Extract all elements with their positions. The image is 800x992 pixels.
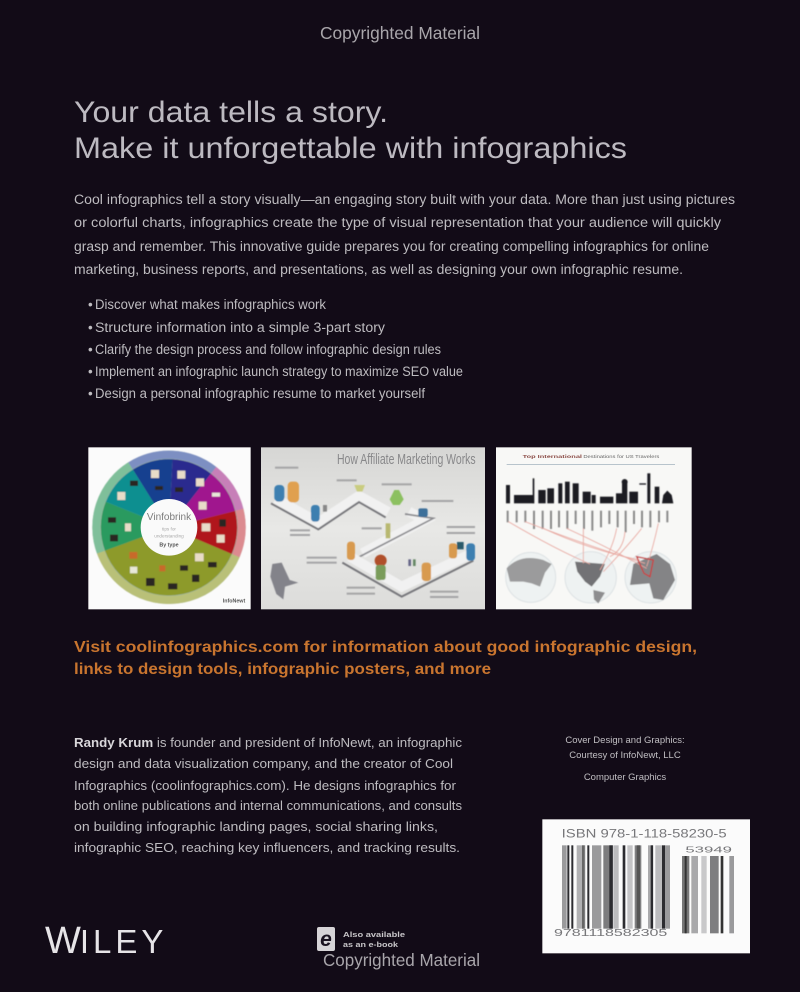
bottom watermark: Copyrighted Material	[323, 950, 480, 970]
intro paragraph: or colorful charts, infographics create the type of visual representation that your audience will quickly	[74, 215, 721, 230]
intro paragraph: grasp and remember. This innovative guide prepares you for creating compelling infographics for online	[74, 239, 709, 254]
orange call to action: Visit coolinfographics.com for information about good infographic design,	[74, 639, 697, 656]
panel: affiliate marketing board game	[261, 447, 485, 609]
panel: color wheel infographic: InfoNewt	[223, 599, 245, 605]
author bio	[74, 736, 462, 855]
bullet list: •	[88, 364, 93, 379]
top watermark: Copyrighted Material	[320, 23, 480, 43]
orange call to action: links to design tools, infographic posters, and more	[74, 661, 491, 678]
barcode digits: 9781118582305	[554, 928, 667, 939]
bullet list	[88, 297, 463, 401]
intro paragraph	[74, 192, 735, 277]
wheel center	[141, 499, 197, 556]
author bio: Randy Krum is founder and president of InfoNewt, an infographic	[74, 736, 462, 750]
wheel tiles	[117, 470, 225, 561]
icon: e-book: e	[320, 928, 332, 951]
bullet list: •	[88, 320, 93, 335]
panel: color wheel infographic: tips for	[162, 527, 176, 532]
author bio: Infographics (coolinfographics.com). He designs infographics for	[74, 779, 456, 793]
board tracks	[271, 496, 473, 597]
bullet list: Discover what makes infographics work	[95, 297, 326, 312]
ISBN number: ISBN 978-1-118-58230-5	[562, 826, 727, 840]
panel heading: Top International	[523, 454, 583, 460]
panel title: How Affiliate Marketing Works	[337, 452, 476, 468]
add-on bars	[682, 856, 734, 933]
author bio: infographic SEO, reaching key influencers, and tracking results.	[74, 841, 460, 855]
panel: color wheel infographic	[67, 425, 271, 629]
globes	[506, 552, 556, 602]
characters	[270, 482, 475, 599]
barcode	[542, 819, 750, 953]
cover credits: Computer Graphics	[584, 772, 666, 783]
author bio: on building infographic landing pages, social sharing links,	[74, 820, 438, 834]
bullet list: •	[88, 297, 93, 312]
e-book badge: Also available	[343, 930, 405, 939]
bullet list: Design a personal infographic resume to market yourself	[95, 386, 425, 401]
flow lines	[508, 522, 658, 572]
title: Make it unforgettable with infographics	[74, 132, 627, 165]
panel: color wheel infographic: By type	[159, 543, 179, 549]
intro paragraph: Cool infographics tell a story visually—an engaging story built with your data. More than just using pictures	[74, 192, 735, 207]
panel: color wheel infographic: understanding	[154, 533, 184, 538]
city labels	[507, 511, 668, 532]
intro paragraph: marketing, business reports, and presentations, as well as designing your own infographic resume.	[74, 262, 683, 277]
title: Your data tells a story.	[74, 96, 388, 129]
author bio: both online publications and internal communications, and consults	[74, 799, 462, 813]
cover credits	[565, 735, 685, 783]
cover credits: Courtesy of InfoNewt, LLC	[569, 750, 681, 761]
orange call to action	[74, 639, 697, 678]
Wiley logo: WILEY	[45, 920, 167, 962]
bullet list: Clarify the design process and follow infographic design rules	[95, 342, 441, 357]
bullet list: •	[88, 386, 93, 401]
bullet list: Implement an infographic launch strategy to maximize SEO value	[95, 364, 463, 379]
e-book badge	[317, 927, 405, 951]
panel: color wheel infographic: Vinfobrink	[147, 512, 191, 523]
main bars	[562, 845, 670, 929]
e-book badge: as an e-book	[343, 940, 399, 949]
cover credits: Cover Design and Graphics:	[565, 735, 685, 746]
wheel outer ring	[92, 451, 246, 604]
bullet list: Structure information into a simple 3-part story	[95, 320, 385, 335]
bullet list: •	[88, 342, 93, 357]
panel: skyline and globes map: Destinations for US Travelers	[583, 454, 660, 460]
skyline	[506, 473, 673, 503]
author bio: design and data visualization company, and the creator of Cool	[74, 757, 453, 771]
price digits: 53949	[685, 845, 732, 855]
title	[74, 96, 627, 165]
panel: skyline and globes map	[496, 447, 692, 609]
panel captions	[275, 467, 475, 598]
